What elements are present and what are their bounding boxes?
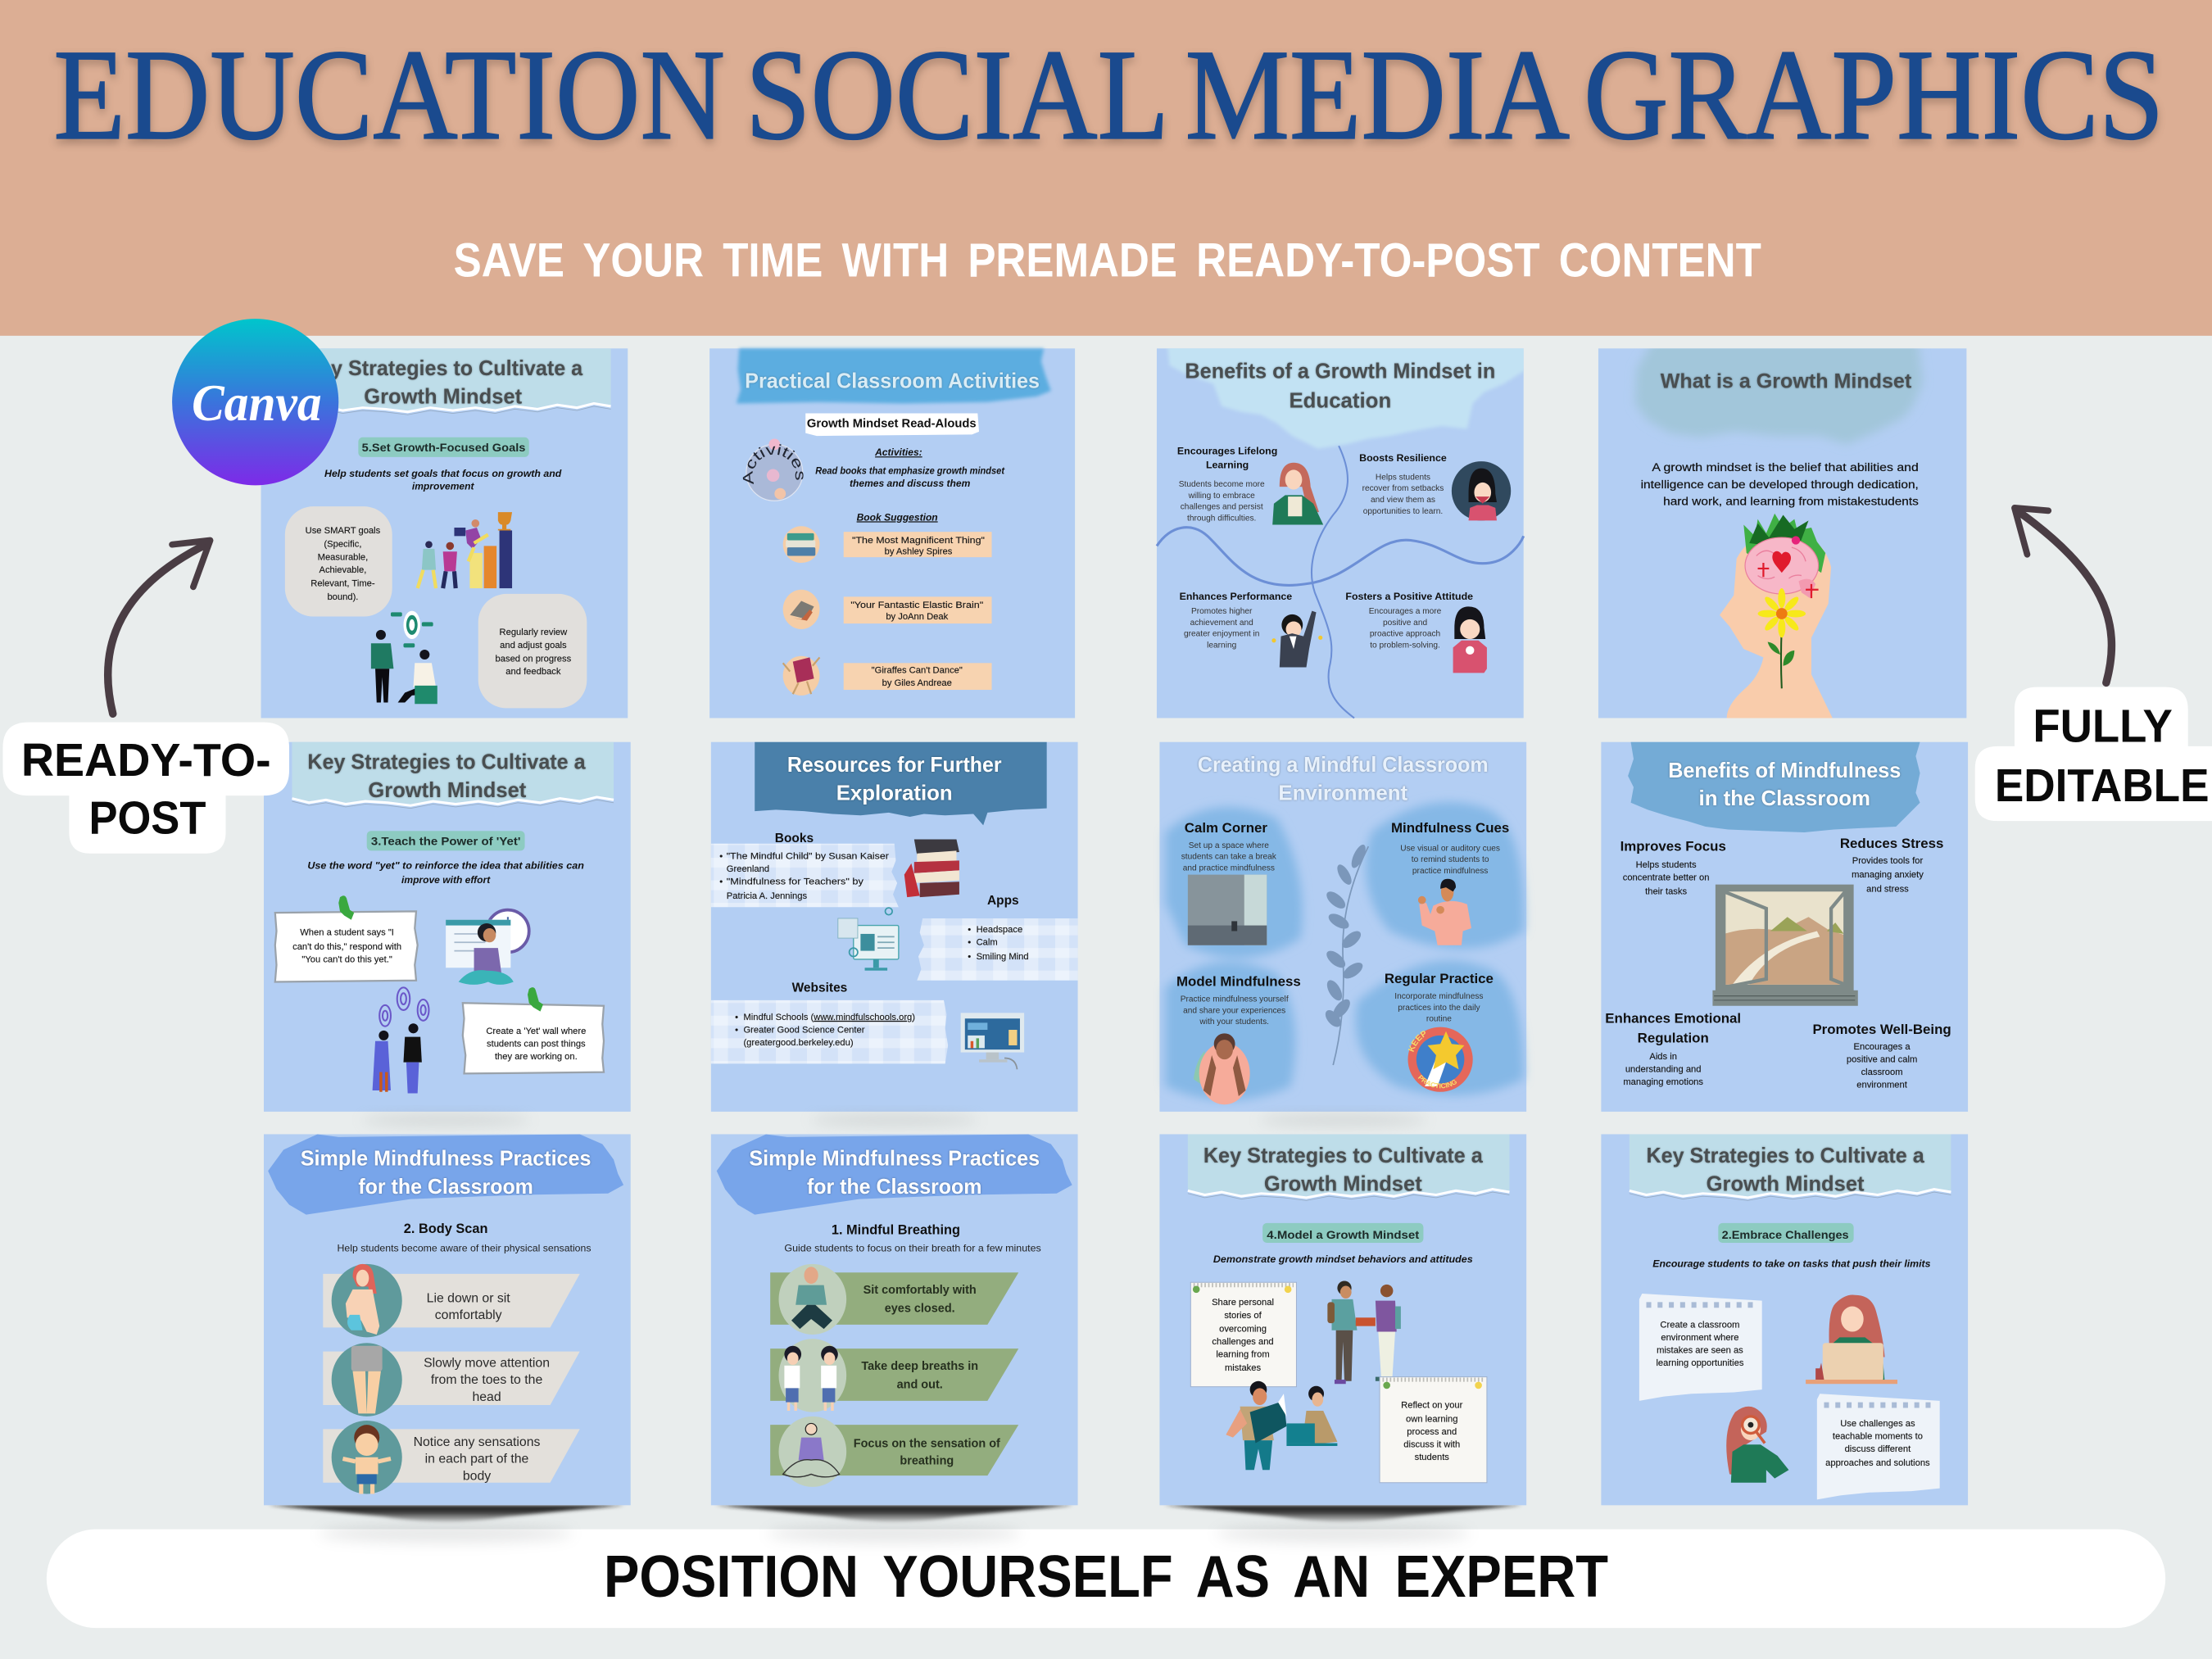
book 2	[783, 590, 992, 629]
definition text: hard work, and learning from mistakestudents	[1663, 494, 1919, 507]
intro text: improvement	[412, 481, 474, 492]
label text: READY-TO-	[21, 735, 271, 786]
tagline: POSITION YOURSELF AS AN EXPERT	[604, 1544, 1608, 1610]
promotes well-being: Encourages a	[1854, 1042, 1911, 1052]
enhances regulation: managing emotions	[1623, 1077, 1703, 1087]
benefit: lifelong learning: through difficulties.	[1187, 514, 1256, 523]
brush title: Benefits of Mindfulness	[1668, 759, 1901, 782]
card: benefits of mindfulness	[1601, 742, 1968, 1112]
note: classroom environment: environment where	[1661, 1333, 1739, 1343]
illustration: climbing bar chart	[418, 512, 512, 588]
enhances regulation: Regulation	[1638, 1031, 1709, 1046]
note: review goals: and adjust goals	[500, 641, 567, 650]
intro text: Demonstrate growth mindset behaviors and attitudes	[1213, 1253, 1473, 1265]
apps list: •	[968, 925, 971, 935]
card title: Benefits of a Growth Mindset in	[1185, 360, 1495, 383]
note: yet reply	[275, 895, 418, 981]
faint shadows under second row	[361, 1114, 1428, 1126]
note: teachable moments: Use challenges as	[1840, 1419, 1915, 1429]
mindfulness cues	[1391, 820, 1509, 876]
vine	[1322, 843, 1368, 1065]
card: body scan	[264, 1134, 631, 1505]
title ribbon	[292, 742, 614, 809]
benefit: performance: Enhances Performance	[1180, 591, 1292, 602]
calm corner	[1181, 820, 1277, 873]
promotes well-being: positive and calm	[1847, 1055, 1917, 1065]
activities text: Activities:	[874, 446, 922, 458]
note: personal stories: challenges and	[1212, 1337, 1274, 1347]
card: benefits of a growth mindset	[1157, 338, 1526, 718]
card: key strategies 5	[261, 348, 628, 718]
label text: FULLY	[2033, 701, 2173, 753]
title ribbon	[289, 348, 611, 415]
note: teachable moments	[1817, 1394, 1940, 1499]
benefit: resilience: Helps students	[1376, 473, 1430, 482]
brush title: in the Classroom	[1699, 787, 1870, 810]
card title: Key Strategies to Cultivate a	[1203, 1145, 1483, 1167]
promotes well-being: classroom	[1861, 1067, 1903, 1077]
illustration: open window	[1712, 885, 1858, 1006]
illustration: head with brain and flower	[1720, 514, 1833, 718]
model mindfulness: Model Mindfulness	[1176, 974, 1301, 990]
figure: woman writing	[1272, 463, 1323, 525]
card title	[307, 750, 586, 802]
benefit: lifelong learning: challenges and persist	[1181, 503, 1263, 512]
mindfulness cues: to remind students to	[1412, 855, 1489, 864]
note: reflect: discuss it with	[1403, 1440, 1460, 1450]
note: classroom environment	[1639, 1294, 1762, 1401]
icon: keep practicing badge: PRACTICING	[1417, 1075, 1457, 1088]
card title: Growth Mindset	[364, 385, 523, 408]
brush title	[1628, 742, 1920, 832]
subheading	[338, 1222, 592, 1253]
note: SMART goals: Achievable,	[320, 565, 366, 575]
benefit: performance: achievement and	[1190, 619, 1253, 628]
note: personal stories	[1190, 1282, 1296, 1387]
websites list: Websites	[792, 981, 847, 995]
books list: Books	[775, 832, 814, 845]
book 2: by JoAnn Deak	[886, 612, 949, 622]
improves focus: Helps students	[1636, 860, 1697, 870]
step 1	[323, 1264, 580, 1337]
note: reflect: Reflect on your	[1401, 1400, 1463, 1410]
books list: •	[719, 852, 723, 862]
label: fully editable	[1975, 687, 2212, 821]
header banner	[0, 0, 2212, 336]
label text	[1995, 701, 2210, 812]
book 3	[783, 656, 992, 696]
benefit: resilience: opportunities to learn.	[1363, 507, 1443, 516]
step 2: and out.	[897, 1378, 943, 1391]
card: key strategies 3	[264, 742, 631, 1112]
note: yet wall: students can post things	[487, 1040, 586, 1049]
illustration: man touching chest	[1418, 879, 1471, 945]
figure: cheering man	[1271, 611, 1322, 667]
websites list: (greatergood.berkeley.edu)	[743, 1038, 854, 1048]
card title	[1203, 1145, 1483, 1195]
definition text: A growth mindset is the belief that abilities and	[1652, 460, 1919, 474]
activities badge	[742, 439, 804, 501]
improves focus: concentrate better on	[1623, 873, 1709, 882]
book 1	[783, 526, 992, 563]
label: ready-to-post	[2, 723, 289, 854]
watercolor title background	[1167, 349, 1524, 449]
note: personal stories: learning from	[1216, 1350, 1270, 1360]
note: personal stories: overcoming	[1219, 1325, 1267, 1335]
card title	[1198, 754, 1489, 805]
improves focus: their tasks	[1645, 887, 1688, 897]
icon: computer dashboard	[838, 908, 899, 971]
illustration: students exchanging book	[1327, 1281, 1401, 1384]
note: teachable moments: discuss different	[1845, 1444, 1911, 1454]
note: SMART goals: (Specific,	[324, 539, 361, 549]
subheading: Growth Mindset Read-Alouds	[807, 418, 977, 431]
model mindfulness: with your students.	[1199, 1018, 1269, 1027]
brush title	[737, 348, 1051, 403]
note: yet wall: Create a 'Yet' wall where	[486, 1027, 586, 1036]
promotes well-being: Promotes Well-Being	[1812, 1022, 1951, 1037]
illustration: woman with laptop	[1806, 1295, 1897, 1384]
figure: smiling girl	[1453, 606, 1487, 673]
brush title: for the Classroom	[807, 1176, 981, 1199]
step 3: Notice any sensations	[414, 1435, 541, 1449]
canva wordmark: Canva	[192, 374, 322, 432]
benefit: positive attitude: Encourages a more	[1369, 607, 1442, 616]
regular practice: practices into the daily	[1398, 1004, 1480, 1013]
note: teachable moments: teachable moments to	[1833, 1431, 1923, 1441]
card title: Education	[1289, 390, 1391, 413]
mindfulness cues: Use visual or auditory cues	[1400, 844, 1500, 853]
note: review goals: Regularly review	[500, 628, 568, 637]
subheading	[805, 414, 979, 436]
brush title: Practical Classroom Activities	[745, 370, 1040, 393]
badge	[367, 831, 525, 850]
books list: "The Mindful Child" by Susan Kaiser	[727, 852, 889, 862]
brush title: Resources for Further	[787, 754, 1002, 777]
note: SMART goals: Relevant, Time-	[310, 578, 375, 588]
websites list	[711, 981, 948, 1063]
icon: keep practicing badge: KEEP	[1407, 1031, 1426, 1052]
brush title: Exploration	[836, 782, 953, 805]
activities text	[815, 446, 1005, 523]
benefit: lifelong learning: Students become more	[1179, 480, 1265, 489]
card title: Environment	[1278, 782, 1408, 805]
note: review goals	[478, 594, 587, 708]
apps list: •	[968, 952, 971, 962]
step 3: breathing	[900, 1454, 954, 1467]
note: reflect: students	[1415, 1453, 1449, 1462]
note: classroom environment: learning opportunities	[1656, 1358, 1744, 1368]
improves focus	[1620, 838, 1726, 897]
activities text: themes and discuss them	[850, 478, 971, 489]
regular practice	[1385, 971, 1494, 1024]
step 3	[770, 1416, 1018, 1487]
note: teachable moments: approaches and solutions	[1825, 1458, 1930, 1468]
websites list: Mindful Schools (www.mindfulschools.org)	[743, 1013, 915, 1022]
card title: Growth Mindset	[1264, 1172, 1422, 1195]
activities text: Read books that emphasize growth mindset	[815, 465, 1005, 477]
reduces stress: managing anxiety	[1852, 870, 1924, 880]
note: yet wall	[463, 987, 604, 1073]
illustration: man with book and woman with laptop	[1226, 1381, 1337, 1470]
step 1: comfortably	[435, 1308, 502, 1322]
card: mindful breathing	[711, 1134, 1078, 1505]
subtitle: SAVE YOUR TIME WITH PREMADE READY-TO-POST CONTENT	[454, 234, 1761, 288]
step 1: Lie down or sit	[427, 1291, 510, 1305]
card title: What is a Growth Mindset	[1661, 370, 1911, 393]
figure: girl in rain	[1452, 461, 1511, 520]
step 3: in each part of the	[425, 1453, 529, 1466]
step 1: eyes closed.	[885, 1302, 955, 1315]
apps list: Smiling Mind	[977, 952, 1029, 962]
icon: book stack	[904, 840, 959, 897]
card title	[1647, 1145, 1924, 1195]
note: reflect	[1380, 1377, 1487, 1483]
brush title: Simple Mindfulness Practices	[749, 1147, 1040, 1170]
step 2: head	[472, 1390, 501, 1404]
enhances regulation	[1605, 1010, 1741, 1087]
card title	[1185, 360, 1495, 413]
book 3: by Giles Andreae	[882, 678, 952, 688]
card title: Creating a Mindful Classroom	[1198, 754, 1489, 777]
connecting curves	[1157, 446, 1524, 718]
subheading	[784, 1223, 1041, 1253]
intro text: Help students set goals that focus on growth and	[324, 468, 562, 479]
step 2	[323, 1343, 580, 1416]
note: classroom environment: mistakes are seen as	[1657, 1345, 1743, 1355]
books list: Patricia A. Jennings	[727, 891, 807, 901]
book 2: "Your Fantastic Elastic Brain"	[850, 601, 983, 610]
websites list: Greater Good Science Center	[743, 1025, 865, 1035]
books list: •	[719, 877, 723, 887]
badge	[1262, 1223, 1423, 1243]
promotes well-being: environment	[1856, 1081, 1908, 1090]
benefit: positive attitude	[1345, 591, 1473, 650]
card title: Key Strategies to Cultivate a	[305, 357, 583, 380]
label text	[21, 735, 271, 845]
intro text: improve with effort	[401, 874, 491, 886]
benefit: lifelong learning: Encourages Lifelong	[1177, 445, 1277, 456]
note: review goals: based on progress	[496, 655, 572, 664]
intro text	[324, 468, 562, 492]
note: yet reply: "You can't do this yet."	[301, 954, 392, 964]
calm corner: and practice mindfulness	[1183, 863, 1275, 873]
step 2	[770, 1339, 1018, 1412]
step 2: Slowly move attention	[424, 1357, 550, 1371]
badge: 2.Embrace Challenges	[1722, 1229, 1849, 1241]
calm corner: students can take a break	[1181, 853, 1277, 862]
regular practice: Regular Practice	[1385, 971, 1494, 986]
note: SMART goals: Use SMART goals	[306, 526, 381, 536]
note: SMART goals: bound).	[327, 592, 358, 602]
step 3: body	[463, 1469, 491, 1483]
note: classroom environment: Create a classroom	[1660, 1320, 1739, 1330]
model mindfulness	[1176, 974, 1301, 1027]
reduces stress: Reduces Stress	[1840, 836, 1943, 851]
icon: keep practicing badge	[1407, 1027, 1473, 1092]
illustration: meditating person	[1194, 1033, 1250, 1104]
note: SMART goals: Measurable,	[318, 553, 368, 563]
websites list: •	[735, 1025, 738, 1035]
intro text: Use the word "yet" to reinforce the idea that abilities can	[307, 860, 584, 872]
note: yet reply: can't do this," respond with	[292, 942, 401, 952]
watercolor title background	[1635, 336, 1923, 444]
apps list	[917, 894, 1078, 981]
note: personal stories: Share personal	[1212, 1298, 1274, 1308]
badge: 5.Set Growth-Focused Goals	[362, 442, 526, 454]
benefit: lifelong learning	[1177, 445, 1277, 523]
promotes well-being	[1812, 1022, 1951, 1090]
activities text: Book Suggestion	[857, 511, 938, 523]
step 1	[770, 1264, 1018, 1335]
subheading: 1. Mindful Breathing	[832, 1223, 960, 1238]
intro text	[307, 860, 584, 886]
brush title: Simple Mindfulness Practices	[301, 1147, 591, 1170]
benefit: lifelong learning: Learning	[1206, 460, 1249, 471]
card: key strategies 4	[1159, 1134, 1526, 1505]
benefit: positive attitude: proactive approach	[1370, 630, 1440, 639]
card shadows under third row	[268, 1505, 1522, 1542]
illustration: woman with clock	[446, 910, 529, 985]
regular practice: Incorporate mindfulness	[1394, 992, 1483, 1001]
subheading: Guide students to focus on their breath for a few minutes	[784, 1243, 1041, 1253]
title ribbon	[1630, 1134, 1951, 1200]
card: what is a growth mindset	[1598, 336, 1966, 718]
brush title	[755, 742, 1047, 825]
label text: POST	[88, 793, 206, 845]
card title: Key Strategies to Cultivate a	[1647, 1145, 1924, 1167]
apps list: Headspace	[977, 925, 1022, 935]
card title	[305, 357, 583, 408]
reduces stress: and stress	[1866, 884, 1909, 894]
regular practice: routine	[1426, 1015, 1452, 1024]
title ribbon	[1188, 1134, 1509, 1200]
step 3: Focus on the sensation of	[854, 1438, 1000, 1451]
benefit: resilience: and view them as	[1371, 496, 1435, 505]
benefit: lifelong learning: willing to embrace	[1188, 492, 1255, 501]
model mindfulness: and share your experiences	[1183, 1006, 1285, 1015]
mindfulness cues: Mindfulness Cues	[1391, 820, 1509, 836]
book 3: "Giraffes Can't Dance"	[872, 665, 963, 675]
note: reflect: own learning	[1406, 1415, 1457, 1425]
enhances regulation: understanding and	[1625, 1065, 1702, 1075]
enhances regulation: Aids in	[1649, 1052, 1677, 1062]
books list: "Mindfulness for Teachers" by	[727, 877, 863, 887]
subheading: 2. Body Scan	[404, 1222, 487, 1236]
note: personal stories: stories of	[1224, 1311, 1262, 1321]
model mindfulness: Practice mindfulness yourself	[1181, 995, 1289, 1004]
improves focus: Improves Focus	[1620, 838, 1726, 854]
benefit: performance: greater enjoyment in	[1184, 630, 1259, 639]
calm corner: Set up a space where	[1189, 841, 1269, 850]
badge	[358, 437, 529, 457]
apps list: Calm	[977, 938, 998, 948]
badge: 3.Teach the Power of 'Yet'	[371, 835, 520, 847]
books list: Greenland	[727, 864, 769, 874]
calm corner: Calm Corner	[1185, 820, 1267, 836]
illustration: two people and target	[371, 611, 437, 704]
bottom pill banner	[47, 1530, 2165, 1628]
definition text: intelligence can be developed through dedication,	[1641, 478, 1919, 491]
step 1: Sit comfortably with	[863, 1284, 977, 1297]
icon: monitor	[961, 1013, 1024, 1069]
step 2: from the toes to the	[431, 1373, 542, 1387]
benefit: resilience: recover from setbacks	[1362, 484, 1444, 493]
note: reflect: process and	[1407, 1427, 1457, 1437]
websites list: •	[735, 1013, 738, 1022]
book 1: by Ashley Spires	[885, 547, 953, 557]
brush title	[717, 1134, 1072, 1215]
badge	[1718, 1223, 1854, 1243]
benefit: performance: learning	[1207, 641, 1236, 650]
reduces stress	[1840, 836, 1943, 894]
activities badge: Activities	[742, 444, 804, 484]
enhances regulation: Enhances Emotional	[1605, 1010, 1741, 1026]
subheading: Help students become aware of their physical sensations	[338, 1243, 592, 1253]
books list	[711, 832, 899, 907]
benefit: resilience	[1359, 452, 1447, 516]
card title: Key Strategies to Cultivate a	[307, 750, 586, 773]
reduces stress: Provides tools for	[1852, 856, 1923, 866]
mindfulness cues: practice mindfulness	[1412, 867, 1488, 876]
benefit: positive attitude: positive and	[1383, 619, 1427, 628]
illustration: woman with magnifier	[1726, 1407, 1788, 1483]
illustration: quiet room	[1188, 875, 1267, 945]
badge: 4.Model a Growth Mindset	[1267, 1229, 1420, 1241]
watercolor patches	[1165, 802, 1524, 1100]
card: practical classroom activities	[709, 346, 1075, 718]
intro text: Encourage students to take on tasks that push their limits	[1652, 1258, 1931, 1269]
card title: Growth Mindset	[368, 779, 527, 802]
step 3	[323, 1421, 580, 1494]
arrow: right	[2015, 508, 2111, 682]
apps list: Apps	[987, 894, 1019, 908]
card: mindful classroom environment	[1158, 742, 1530, 1112]
card title: Growth Mindset	[1707, 1172, 1865, 1195]
step 2: Take deep breaths in	[861, 1360, 978, 1373]
arrow: left	[108, 541, 211, 714]
note: review goals: and feedback	[505, 667, 561, 677]
note: SMART goals	[285, 506, 392, 616]
benefit: positive attitude: to problem-solving.	[1370, 641, 1440, 650]
note: personal stories: mistakes	[1225, 1363, 1262, 1373]
brush title	[268, 1134, 623, 1215]
benefit: performance	[1180, 591, 1292, 650]
note: yet reply: When a student says "I	[300, 928, 394, 938]
note: yet wall: they are working on.	[495, 1052, 578, 1062]
card: key strategies 2	[1601, 1134, 1968, 1505]
apps list: •	[968, 938, 971, 948]
definition text	[1641, 460, 1919, 507]
book 1: "The Most Magnificent Thing"	[852, 536, 985, 546]
illustration: two people with targets	[373, 987, 428, 1094]
benefit: positive attitude: Fosters a Positive Attitude	[1345, 591, 1473, 602]
benefit: resilience: Boosts Resilience	[1359, 452, 1447, 464]
benefit: performance: Promotes higher	[1191, 607, 1253, 616]
card: resources	[711, 742, 1078, 1112]
canva logo	[172, 319, 338, 485]
brush title: for the Classroom	[358, 1176, 533, 1199]
